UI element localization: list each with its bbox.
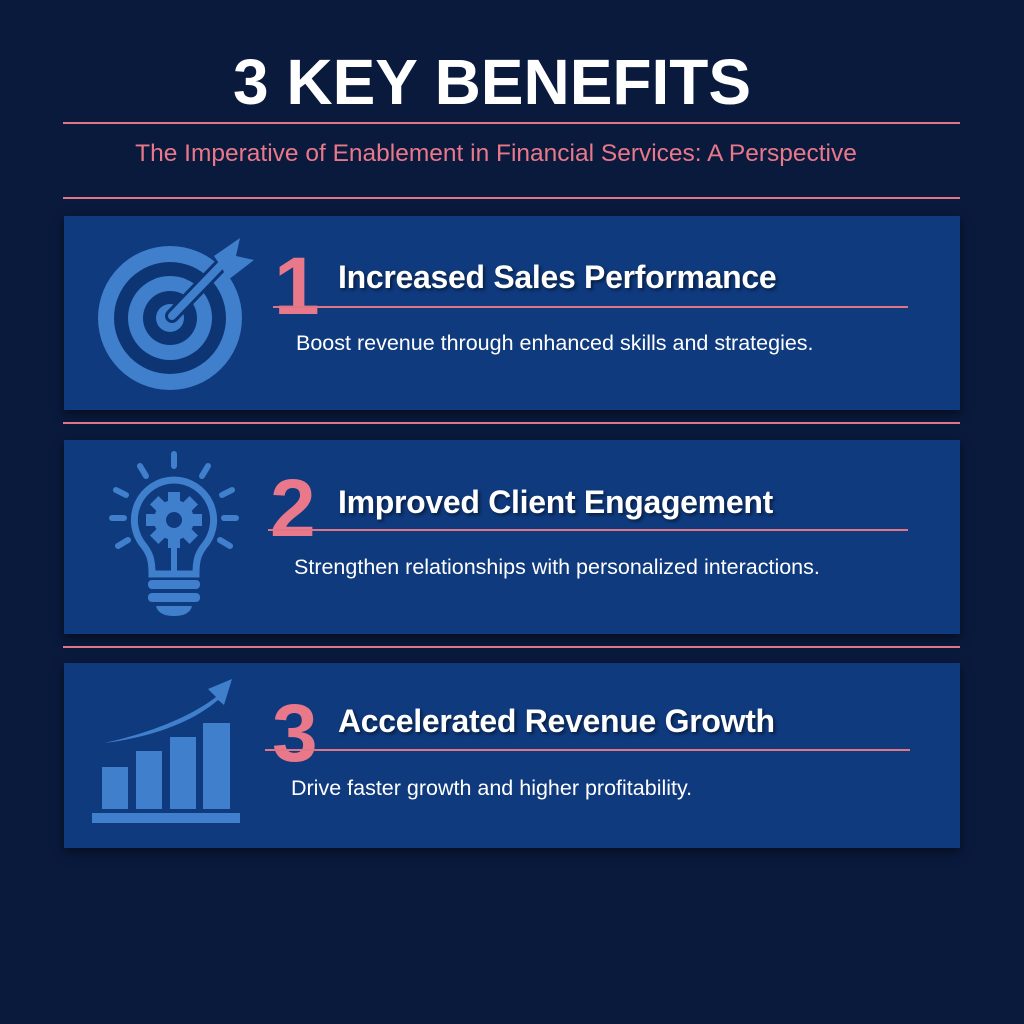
description: Drive faster growth and higher profitability. <box>291 776 692 800</box>
title: 3 KEY BENEFITS <box>233 46 751 118</box>
panel: benefit 1 <box>64 216 960 410</box>
number 1: 1 <box>274 241 320 332</box>
heading: Improved Client Engagement <box>338 484 773 520</box>
number 3: 3 <box>272 688 318 779</box>
heading: Accelerated Revenue Growth <box>338 703 775 739</box>
subtitle: The Imperative of Enablement in Financial Services: A Perspective <box>135 140 857 167</box>
icon: target <box>98 238 254 390</box>
description: Boost revenue through enhanced skills and strategies. <box>296 331 814 355</box>
icon: growth chart <box>92 679 240 823</box>
panel: benefit 3 <box>64 663 960 848</box>
panel: benefit 2 <box>64 440 960 634</box>
number 2: 2 <box>270 463 316 554</box>
description: Strengthen relationships with personalized interactions. <box>294 555 820 579</box>
heading: Increased Sales Performance <box>338 259 776 295</box>
icon: lightbulb <box>109 451 239 616</box>
